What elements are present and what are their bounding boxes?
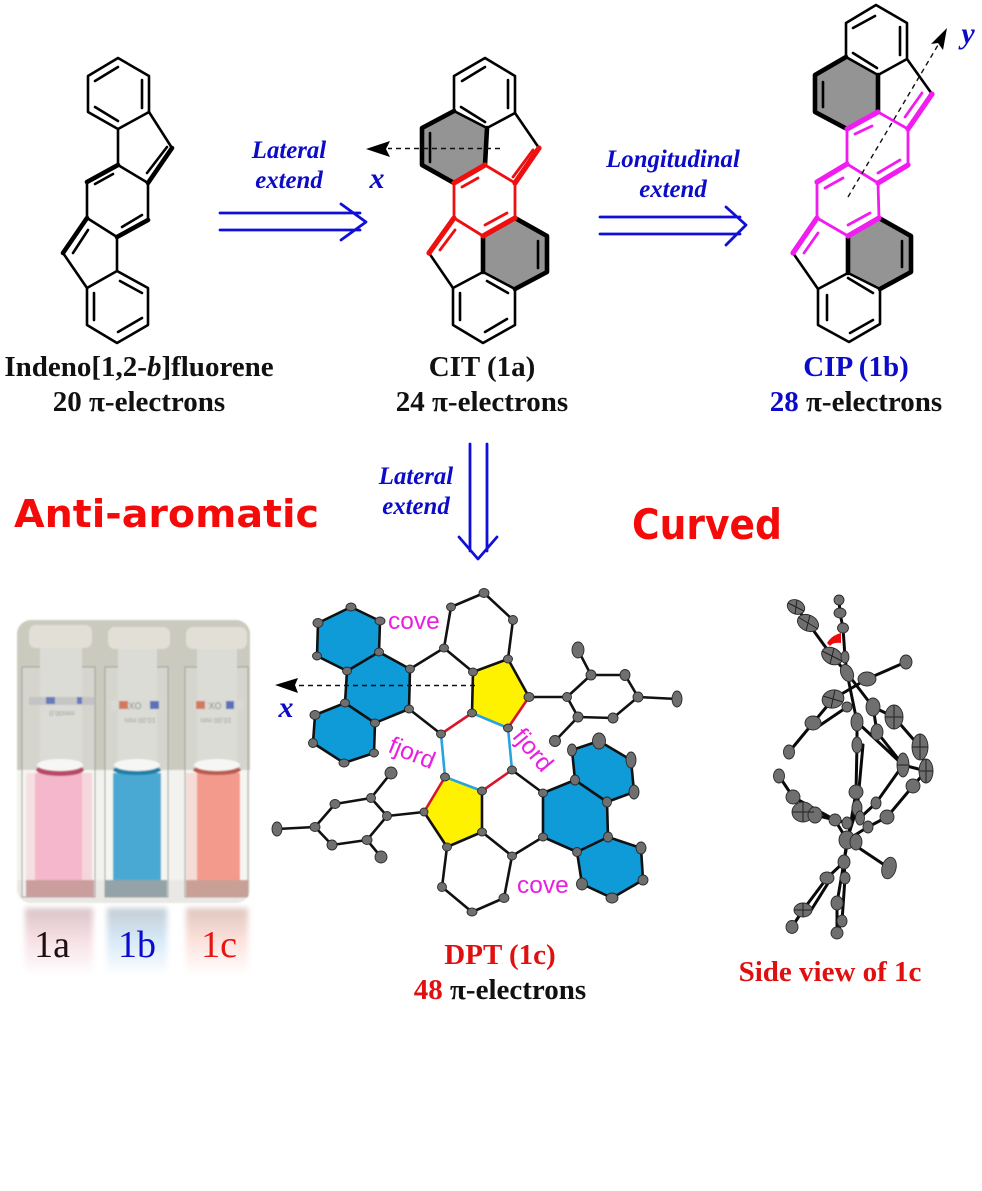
label: 28 pi-electrons: 28 π-electrons bbox=[770, 386, 942, 418]
cuvette 1b bbox=[105, 627, 170, 897]
heading: longitudinal extend: Longitudinal bbox=[605, 146, 740, 173]
molecule: indeno[1,2-b]fluorene bbox=[63, 58, 172, 343]
molecule: CIP 1b bbox=[793, 5, 932, 342]
heading: lateral extend vertical bbox=[378, 463, 453, 520]
molecule: CIT 1a bbox=[422, 58, 547, 343]
cuvette 1c: 10,00 mm bbox=[200, 716, 232, 723]
arrow: longitudinal double arrow bbox=[600, 207, 746, 245]
heading: lateral extend bbox=[251, 137, 326, 194]
cuvette 1b: XO bbox=[128, 701, 142, 711]
curvature angle marker bbox=[827, 633, 841, 646]
label: 20 pi-electrons: 20 π-electrons bbox=[53, 386, 225, 418]
label: Indeno[1,2-b]fluorene: Indeno[1,2-b]fluorene bbox=[4, 351, 274, 383]
cuvette 1a: mm00,0 bbox=[49, 709, 75, 716]
arrow: x axis of 1a bbox=[366, 141, 500, 157]
cuvette 1b: 10,00 mm bbox=[124, 716, 156, 723]
label: fjord left: fjord bbox=[385, 732, 439, 775]
label: CIP (1b): CIP (1b) bbox=[803, 351, 909, 383]
atoms bbox=[774, 595, 933, 939]
side view of 1c bbox=[774, 595, 933, 939]
heading: Curved: Curved bbox=[632, 500, 782, 549]
axis label: x: x bbox=[278, 691, 294, 724]
label: CIT (1a): CIT (1a) bbox=[429, 351, 535, 383]
label: cove upper: cove bbox=[388, 608, 440, 635]
reflection and sample labels bbox=[25, 908, 248, 976]
atom principal-axis crosses bbox=[788, 600, 933, 917]
rings: blue bbox=[313, 607, 643, 898]
arrow: y axis of 1b bbox=[848, 28, 947, 197]
bonds bbox=[779, 600, 926, 933]
bonds bbox=[277, 593, 677, 912]
heading: longitudinal extend bbox=[605, 146, 740, 203]
label: DPT (1c): DPT (1c) bbox=[444, 939, 556, 971]
atoms bbox=[272, 588, 682, 916]
cuvette 1c bbox=[185, 627, 248, 897]
axis label: x: x bbox=[368, 162, 384, 195]
label: 1b: 1b bbox=[118, 924, 156, 966]
arrow: vertical double arrow bbox=[459, 444, 497, 559]
label: 1c: 1c bbox=[201, 924, 237, 966]
cuvette 1c: XO bbox=[208, 701, 222, 711]
arrow: x axis of 1c bbox=[275, 678, 475, 693]
rings: yellow pentagons bbox=[424, 659, 529, 847]
heading: lateral extend: extend bbox=[255, 167, 323, 194]
label: cove lower: cove bbox=[517, 872, 569, 899]
panel: cuvette photo bbox=[17, 620, 250, 903]
heading: lateral extend vertical: extend bbox=[382, 493, 450, 520]
axis label: y: y bbox=[958, 17, 975, 50]
arrow: lateral double arrow bbox=[220, 204, 366, 240]
label: 48 pi-electrons: 48 π-electrons bbox=[414, 974, 586, 1006]
label: fjord right: fjord bbox=[507, 723, 558, 777]
heading: lateral extend vertical: Lateral bbox=[378, 463, 453, 490]
label: 24 pi-electrons: 24 π-electrons bbox=[396, 386, 568, 418]
heading: lateral extend: Lateral bbox=[251, 137, 326, 164]
heading: longitudinal extend: extend bbox=[639, 176, 707, 203]
cuvette 1a bbox=[22, 625, 95, 897]
label: side view of 1c: Side view of 1c bbox=[739, 956, 922, 988]
label: 1a: 1a bbox=[34, 924, 70, 966]
ORTEP structure of DPT 1c bbox=[272, 588, 682, 916]
heading: Anti-aromatic: Anti-aromatic bbox=[14, 492, 319, 536]
